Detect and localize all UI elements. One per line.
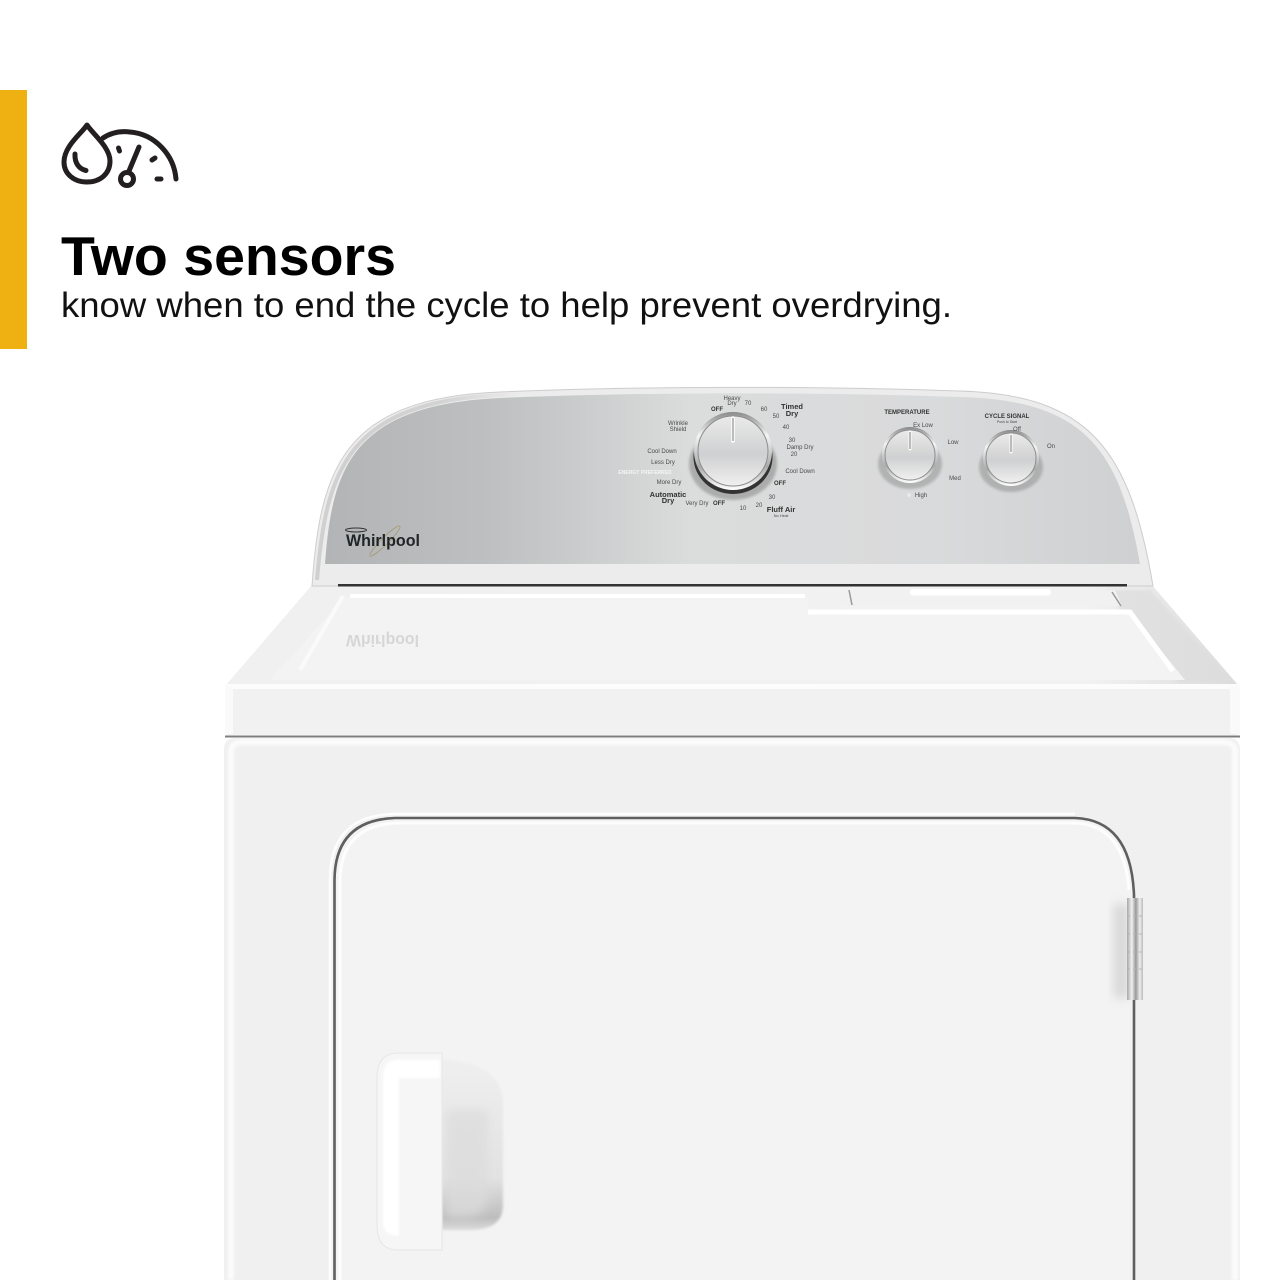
subheading: know when to end the cycle to help prevent overdrying. — [61, 286, 952, 325]
dryer door — [330, 814, 1134, 1280]
cycle signal labels: CYCLE SIGNAL — [985, 414, 1030, 420]
temperature labels: Med — [949, 476, 961, 482]
dial labels: ENERGY PREFERRED — [618, 470, 672, 476]
cycle signal labels: Push to Start — [997, 420, 1017, 424]
dial labels: 50 — [773, 414, 780, 420]
dial labels: Very Dry — [685, 501, 709, 507]
dial labels: 20 — [756, 503, 763, 509]
dial labels: Cool Down — [647, 449, 677, 455]
dial labels: Dry — [662, 496, 675, 505]
dryer illustration — [224, 387, 1240, 1280]
dryer top surface — [226, 585, 1238, 685]
door handle — [377, 1053, 503, 1250]
logo: Whirlpool: Whirlpool — [346, 532, 420, 550]
dial: cycle signal — [979, 430, 1043, 492]
dial labels: 40 — [783, 425, 790, 431]
dial labels: Wrinkle — [668, 421, 689, 427]
dial: temperature — [878, 427, 942, 489]
dial labels: Damp Dry — [786, 445, 814, 451]
dial labels: Dry — [786, 409, 799, 418]
dial labels: 10 — [740, 506, 747, 512]
control console — [312, 387, 1153, 586]
dial: cycle selector — [689, 412, 777, 500]
dial labels: 70 — [745, 401, 752, 407]
dial labels: 30 — [769, 495, 776, 501]
dial labels: OFF — [711, 407, 723, 413]
dial labels: Dry — [727, 401, 737, 407]
cycle signal labels: On — [1047, 444, 1055, 450]
dial labels — [618, 396, 815, 518]
temperature labels: High — [915, 493, 927, 499]
dial labels: Automatic — [650, 490, 686, 499]
dial labels: Cool Down — [785, 469, 815, 475]
dial labels: 30 — [789, 438, 796, 444]
temperature labels — [884, 410, 961, 499]
temperature labels: Ex Low — [913, 423, 933, 429]
dial labels: Timed — [781, 402, 803, 411]
reflected logo on lid: Whirlpool — [346, 631, 419, 649]
icon: water drop and sensor gauge — [64, 125, 176, 186]
front band — [225, 684, 1240, 738]
dial labels: OFF — [713, 501, 725, 507]
dial labels: Shield — [670, 427, 686, 433]
cycle signal labels — [985, 414, 1055, 450]
dial labels: Less Dry — [651, 460, 675, 466]
dial labels: More Dry — [657, 480, 681, 486]
dial labels: No Heat — [774, 513, 789, 518]
door hinge — [1114, 898, 1143, 1000]
yellow accent bar — [0, 90, 27, 349]
dryer body — [224, 738, 1240, 1280]
dial labels: OFF — [774, 481, 786, 487]
dial labels: Heavy — [723, 396, 741, 402]
temperature labels: TEMPERATURE — [884, 410, 930, 416]
temperature labels: Low — [947, 440, 959, 446]
dial labels: Fluff Air — [767, 505, 795, 514]
dial labels: 60 — [761, 407, 768, 413]
cycle signal labels: Off — [1013, 427, 1021, 433]
logo: Whirlpool — [346, 524, 420, 558]
heading: Two sensors — [61, 226, 396, 287]
dial labels: 20 — [791, 452, 798, 458]
